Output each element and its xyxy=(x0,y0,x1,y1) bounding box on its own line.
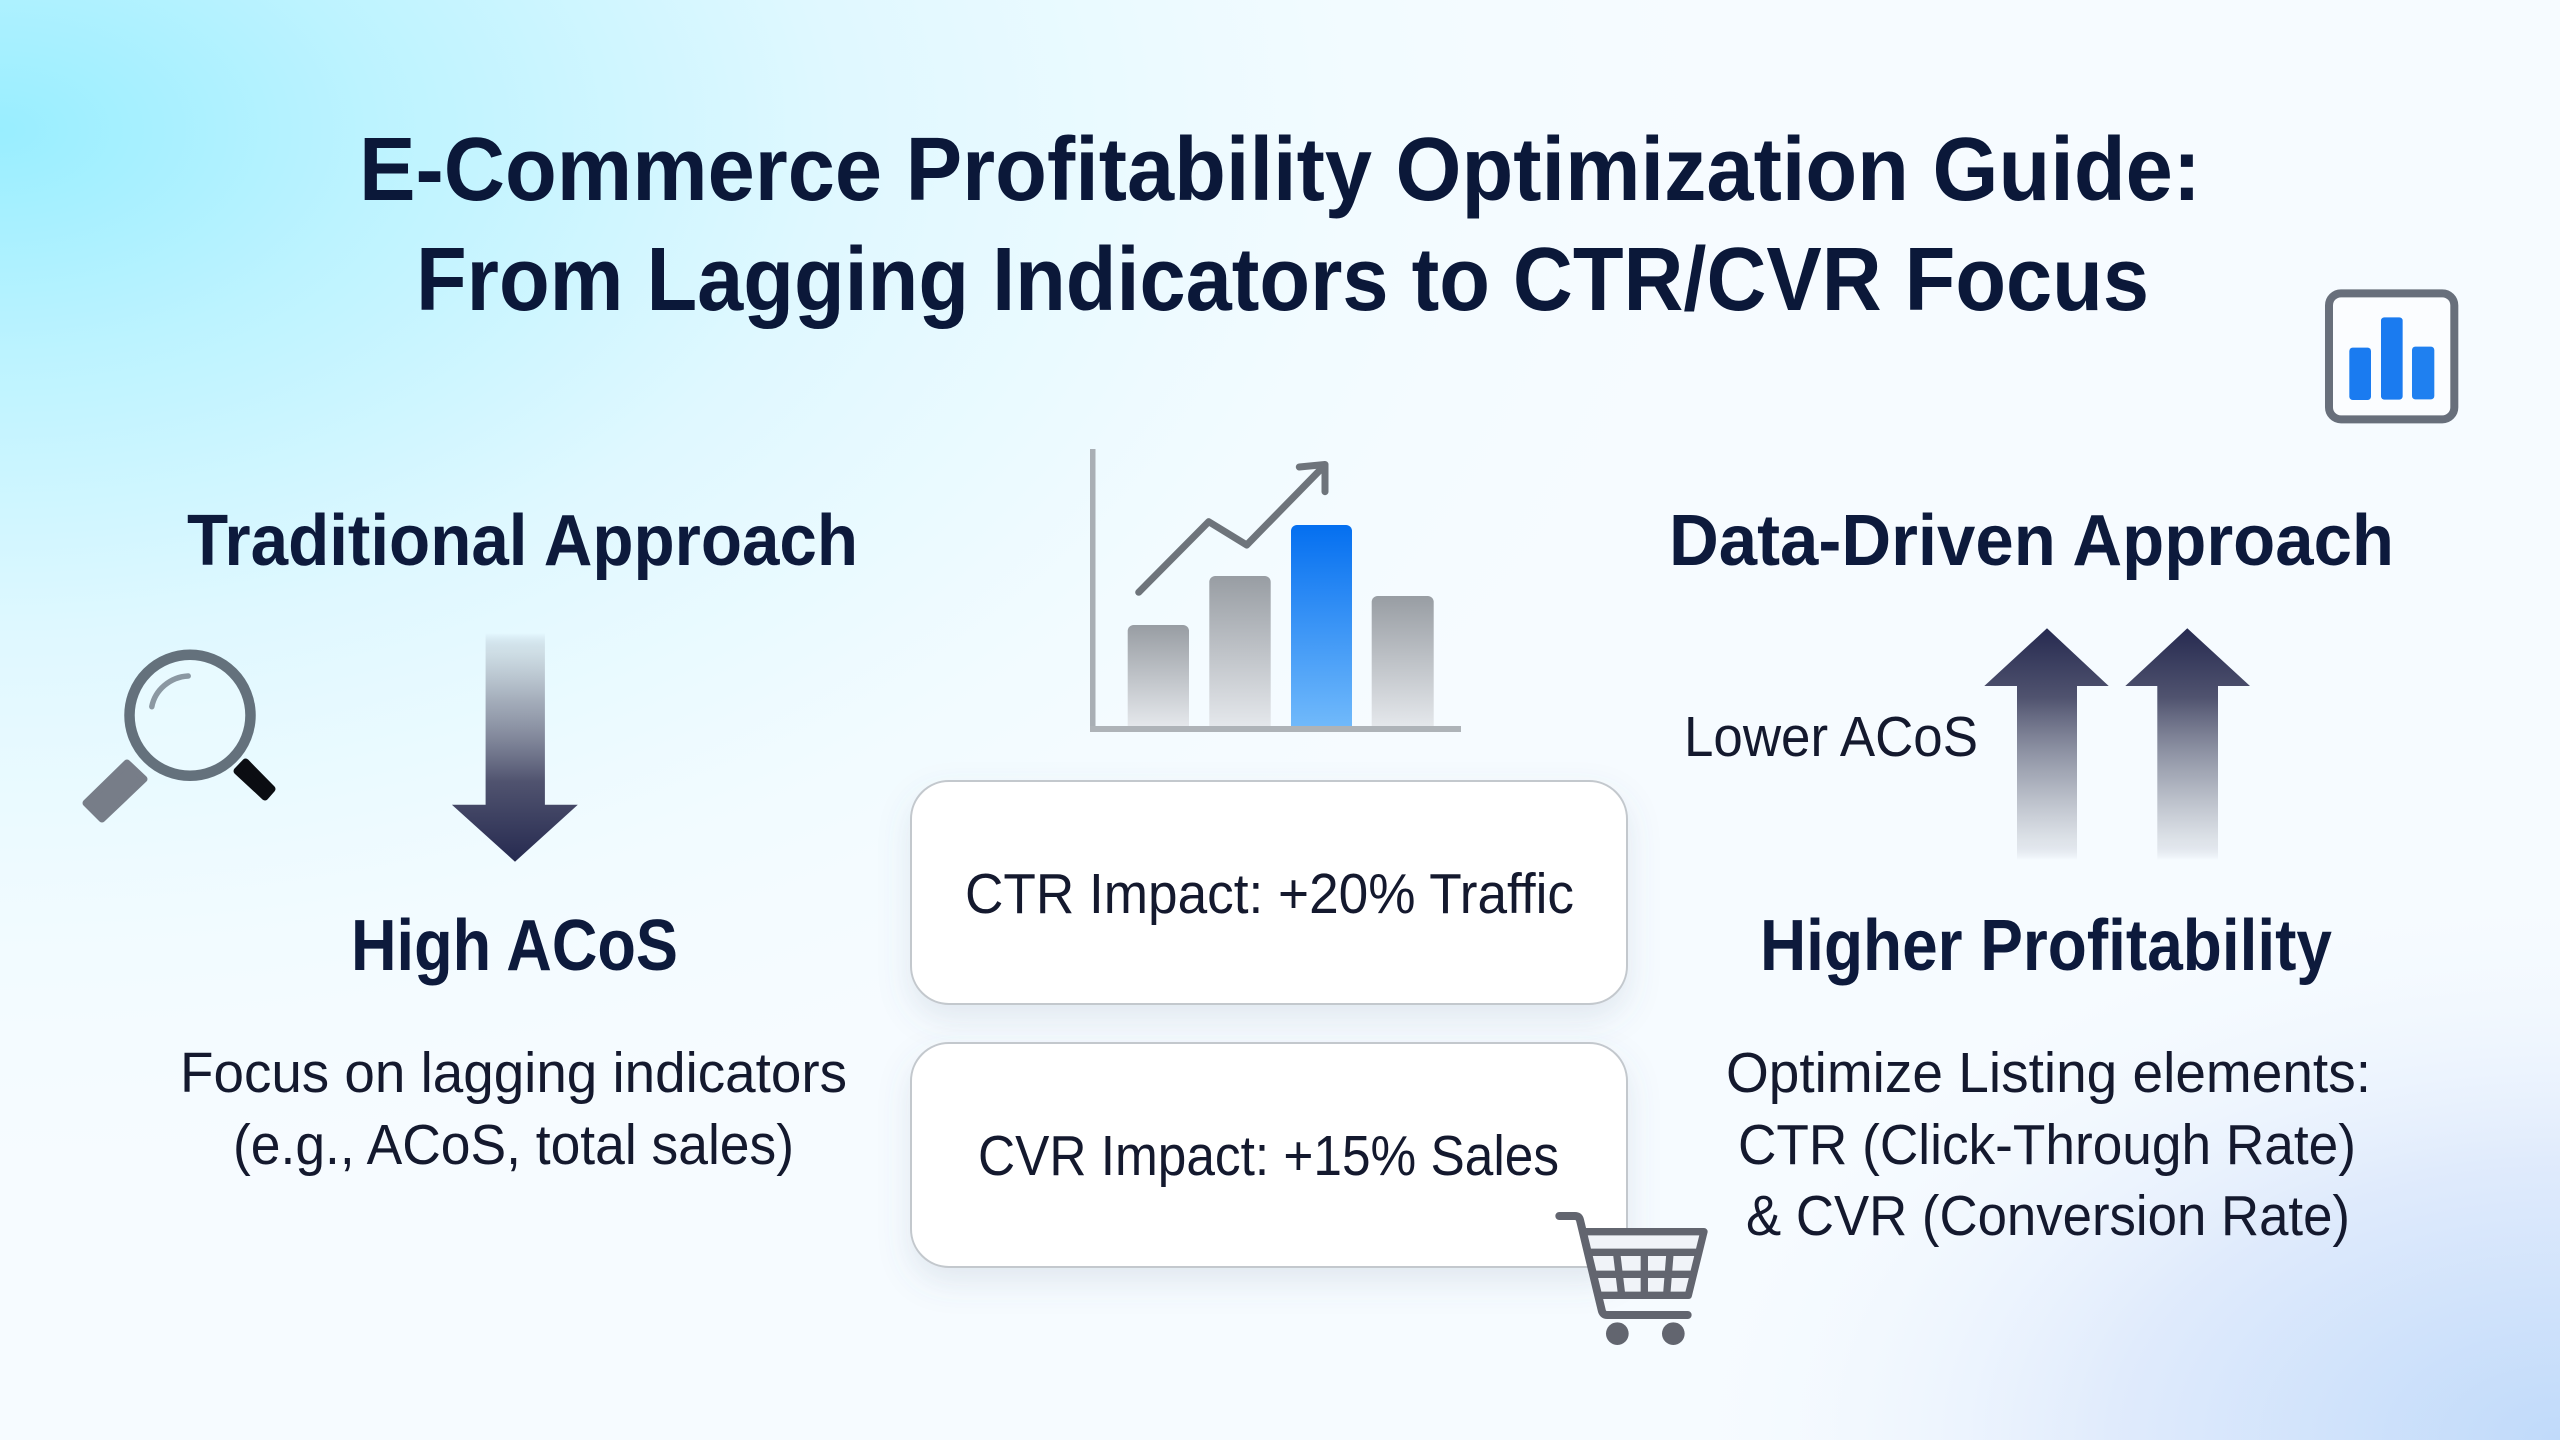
icon: shopping cart xyxy=(1559,1216,1704,1345)
title: E-Commerce Profitability Optimization Guide: xyxy=(359,120,2201,220)
title xyxy=(359,120,2201,330)
card: ctr impact xyxy=(911,781,1627,1004)
card: cvr impact: CVR Impact: +15% Sales xyxy=(978,1124,1559,1188)
text: data-driven description: & CVR (Conversion Rate) xyxy=(1746,1184,2350,1248)
chart: growth bars xyxy=(1090,449,1461,732)
arrow: up left xyxy=(1984,628,2109,860)
text: data-driven description: Optimize Listing elements: xyxy=(1726,1041,2371,1105)
icon: bar chart badge xyxy=(2329,293,2454,419)
label: lower acos: Lower ACoS xyxy=(1684,705,1978,769)
arrow: up right xyxy=(2125,628,2250,860)
heading: high acos: High ACoS xyxy=(351,906,678,986)
text: traditional description xyxy=(180,1041,847,1177)
title: From Lagging Indicators to CTR/CVR Focus xyxy=(416,230,2149,330)
heading: data-driven approach: Data-Driven Approach xyxy=(1669,501,2394,581)
text: data-driven description: CTR (Click-Through Rate) xyxy=(1738,1113,2356,1177)
arrow: down xyxy=(452,633,578,862)
text: data-driven description xyxy=(1726,1041,2371,1248)
heading: traditional approach: Traditional Approach xyxy=(187,501,858,581)
text: traditional description: (e.g., ACoS, total sales) xyxy=(233,1113,794,1177)
card: cvr impact xyxy=(911,1043,1627,1267)
text: traditional description: Focus on lagging indicators xyxy=(180,1041,847,1105)
heading: higher profitability: Higher Profitability xyxy=(1760,906,2332,986)
icon: magnifying glass xyxy=(86,655,272,819)
card: ctr impact: CTR Impact: +20% Traffic xyxy=(965,862,1574,926)
